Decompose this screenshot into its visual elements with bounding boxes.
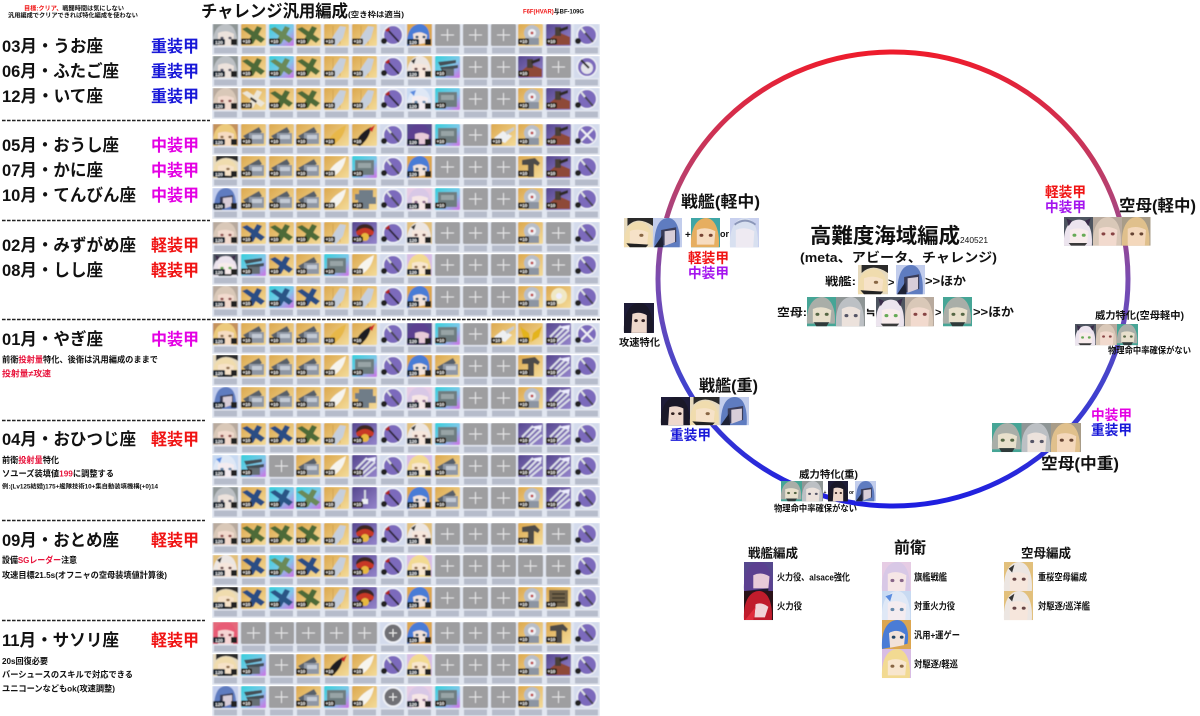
note: September bbox=[2, 554, 167, 580]
callout: power carrier light bbox=[1075, 309, 1191, 356]
callout: battleship light/medium: or bbox=[720, 229, 729, 239]
panel: high difficulty formations (right) bbox=[619, 52, 1196, 678]
fleet row 1 bbox=[212, 523, 600, 554]
fleet row 2 bbox=[212, 355, 600, 386]
note: November: 20s回復必要 bbox=[2, 655, 48, 666]
fleet row 3 bbox=[212, 487, 600, 518]
note: planes: F6F(HVAR)与BF-109G bbox=[523, 6, 584, 16]
label: August: 軽装甲 bbox=[151, 261, 199, 280]
label: November: 11月・サソリ座 bbox=[2, 631, 119, 650]
center title: 240521 bbox=[960, 236, 989, 245]
label: September bbox=[2, 531, 199, 550]
label: February: 軽装甲 bbox=[151, 236, 199, 255]
label: June: 重装甲 bbox=[151, 62, 199, 81]
fleet row 3 bbox=[212, 188, 600, 219]
callout: battleship light/medium: + bbox=[685, 230, 691, 241]
group: November bbox=[2, 622, 600, 716]
callout: power heavy: or bbox=[849, 490, 854, 496]
label: January: 01月・やぎ座 bbox=[2, 329, 103, 349]
label: February: 02月・みずがめ座 bbox=[2, 235, 136, 255]
note: November bbox=[2, 655, 133, 694]
note: April bbox=[2, 454, 159, 490]
group: light armor months bbox=[2, 222, 600, 317]
legend: battleship fleet bbox=[744, 546, 850, 620]
callout: power heavy: 威力特化(重) bbox=[799, 468, 858, 481]
legend: carrier fleet: 対駆逐/巡洋艦 bbox=[1038, 600, 1090, 612]
center: battleship ranking: >>ほか bbox=[925, 274, 966, 288]
note: November: ユニコーンなどもok(攻速調整) bbox=[2, 682, 115, 694]
note: April: ソユーズ装填値199に調整する bbox=[2, 468, 114, 478]
label: April: 04月・おひつじ座 bbox=[2, 430, 136, 449]
note: January: 投射量≠攻速 bbox=[2, 368, 51, 378]
label: May bbox=[2, 136, 199, 155]
label: August bbox=[2, 261, 199, 280]
callout: power carrier light: 物理命中率確保がない bbox=[1108, 344, 1191, 356]
callout: battleship heavy: 重装甲 bbox=[670, 427, 711, 443]
fleet row 1 bbox=[212, 24, 600, 55]
fleet row 2 bbox=[212, 555, 600, 586]
group: September bbox=[2, 523, 600, 618]
fleet row 3 bbox=[212, 686, 600, 716]
group: medium armor months bbox=[2, 124, 600, 219]
label: December bbox=[2, 87, 199, 106]
panel: challenge formations (left) bbox=[2, 1, 600, 716]
fleet row 1 bbox=[212, 124, 600, 155]
legend: battleship fleet: 戦艦編成 bbox=[748, 546, 798, 560]
label: March: 重装甲 bbox=[151, 37, 199, 56]
legend: battleship fleet: 火力役 bbox=[777, 600, 802, 612]
legend: vanguard: 対駆逐/軽巡 bbox=[914, 658, 958, 670]
fleet row 1 bbox=[212, 222, 600, 253]
fleet row 3 bbox=[212, 88, 600, 119]
label: November bbox=[2, 631, 199, 650]
center title bbox=[800, 224, 997, 265]
note: September: 攻速目標21.5s(オフニャの空母装填値計算後) bbox=[2, 569, 167, 580]
label: October: 中装甲 bbox=[151, 186, 199, 205]
callout: attack speed bbox=[619, 303, 660, 349]
callout: battleship heavy bbox=[661, 376, 758, 443]
label: September: 軽装甲 bbox=[151, 531, 199, 550]
fleet row 2 bbox=[212, 56, 600, 87]
callout: carrier medium/heavy bbox=[992, 407, 1132, 473]
label: January bbox=[2, 329, 199, 349]
callout: carrier light/medium: 空母(軽中) bbox=[1119, 196, 1196, 215]
callout: battleship light/medium bbox=[624, 192, 760, 281]
callout: power heavy bbox=[774, 468, 876, 514]
fleet row 1 bbox=[212, 622, 600, 653]
callout: battleship light/medium: 中装甲 bbox=[688, 265, 729, 281]
callout: power heavy: 物理命中率確保がない bbox=[774, 502, 857, 514]
label: November: 軽装甲 bbox=[151, 631, 199, 650]
note: goal bbox=[8, 4, 138, 20]
label: July: 中装甲 bbox=[151, 161, 199, 180]
label: August: 08月・しし座 bbox=[2, 261, 103, 280]
label: March bbox=[2, 37, 199, 56]
legend: vanguard: 汎用+運ゲー bbox=[914, 630, 960, 642]
fleet row 1 bbox=[212, 423, 600, 454]
fleet row 1 bbox=[212, 323, 600, 354]
note: January: 前衛投射量特化、後衛は汎用編成のままで bbox=[2, 354, 158, 364]
callout: power carrier light: 威力特化(空母軽中) bbox=[1095, 309, 1184, 322]
label: May: 中装甲 bbox=[151, 136, 199, 155]
ring: armor gradient bbox=[658, 52, 1128, 506]
title: (空き枠は適当) bbox=[348, 9, 405, 19]
center: carrier ranking: 空母: bbox=[777, 305, 807, 319]
fleet row 3 bbox=[212, 587, 600, 618]
note: April: 前衛投射量特化 bbox=[2, 454, 59, 465]
legend: vanguard: 前衛 bbox=[894, 538, 926, 557]
fleet row 2 bbox=[212, 254, 600, 285]
fleet row 2 bbox=[212, 654, 600, 685]
center: carrier ranking bbox=[777, 297, 1014, 326]
label: July bbox=[2, 161, 199, 180]
fleet row 2 bbox=[212, 156, 600, 187]
label: July: 07月・かに座 bbox=[2, 161, 103, 180]
callout: carrier light/medium bbox=[1045, 184, 1196, 246]
callout: battleship heavy: 戦艦(重) bbox=[699, 376, 758, 395]
center: battleship ranking bbox=[825, 265, 966, 294]
label: June bbox=[2, 61, 199, 81]
callout: battleship light/medium: 軽装甲 bbox=[688, 250, 729, 266]
group: heavy armor months bbox=[2, 24, 600, 119]
center: carrier ranking: >>ほか bbox=[973, 305, 1014, 319]
note: goal: 汎用編成でクリアできれば特化編成を使わない bbox=[8, 12, 138, 20]
label: February bbox=[2, 235, 199, 255]
callout: carrier medium/heavy: 重装甲 bbox=[1091, 422, 1132, 438]
title: チャレンジ汎用編成 bbox=[201, 1, 348, 21]
label: March: 03月・うお座 bbox=[2, 37, 103, 56]
center: battleship ranking: > bbox=[888, 277, 894, 289]
label: September: 09月・おとめ座 bbox=[2, 531, 119, 550]
group: January bbox=[2, 323, 600, 418]
center title: (meta、アビータ、チャレンジ) bbox=[800, 250, 997, 265]
legend: carrier fleet bbox=[1004, 546, 1090, 620]
label: April: 軽装甲 bbox=[151, 430, 199, 449]
label: May: 05月・おうし座 bbox=[2, 136, 119, 155]
fleet row 3 bbox=[212, 387, 600, 418]
label: January: 中装甲 bbox=[151, 330, 199, 349]
label: December: 12月・いて座 bbox=[2, 87, 103, 106]
note: April: 例:(Lv125結婚)175+艦隊技術10+集自動装填機構(+0)14 bbox=[2, 482, 159, 490]
fleet row 2 bbox=[212, 455, 600, 486]
callout: carrier medium/heavy: 空母(中重) bbox=[1041, 454, 1119, 473]
note: November: バーシュースのスキルで対応できる bbox=[2, 668, 133, 680]
callout: attack speed: 攻速特化 bbox=[619, 336, 660, 349]
center: carrier ranking: ≒ bbox=[866, 307, 875, 319]
center: battleship ranking: 戦艦: bbox=[825, 274, 856, 288]
legend: vanguard bbox=[882, 538, 960, 678]
label: December: 重装甲 bbox=[151, 87, 199, 106]
legend: carrier fleet: 重桜空母編成 bbox=[1038, 572, 1087, 584]
legend: vanguard: 対重火力役 bbox=[914, 600, 955, 612]
callout: power heavy: + bbox=[824, 490, 826, 496]
label: June: 06月・ふたご座 bbox=[2, 61, 119, 81]
label: October: 10月・てんびん座 bbox=[2, 186, 136, 205]
callout: carrier light/medium: 軽装甲 bbox=[1045, 184, 1086, 200]
center title: 高難度海域編成 bbox=[810, 224, 960, 248]
group: April bbox=[2, 423, 600, 518]
note: goal: 目標:クリア、戦闘時間は気にしない bbox=[24, 4, 124, 12]
fleet row 3 bbox=[212, 286, 600, 317]
legend: battleship fleet: 火力役、alsace強化 bbox=[777, 572, 850, 584]
note: January bbox=[2, 354, 158, 378]
legend: carrier fleet: 空母編成 bbox=[1021, 546, 1071, 560]
callout: carrier light/medium: 中装甲 bbox=[1045, 199, 1086, 215]
callout: battleship light/medium: 戦艦(軽中) bbox=[681, 192, 760, 211]
center: carrier ranking: > bbox=[935, 307, 941, 319]
legend: vanguard: 旗艦戦艦 bbox=[914, 572, 947, 584]
callout: carrier medium/heavy: 中装甲 bbox=[1091, 407, 1132, 423]
note: September: 設備SGレーダー注意 bbox=[2, 554, 77, 565]
